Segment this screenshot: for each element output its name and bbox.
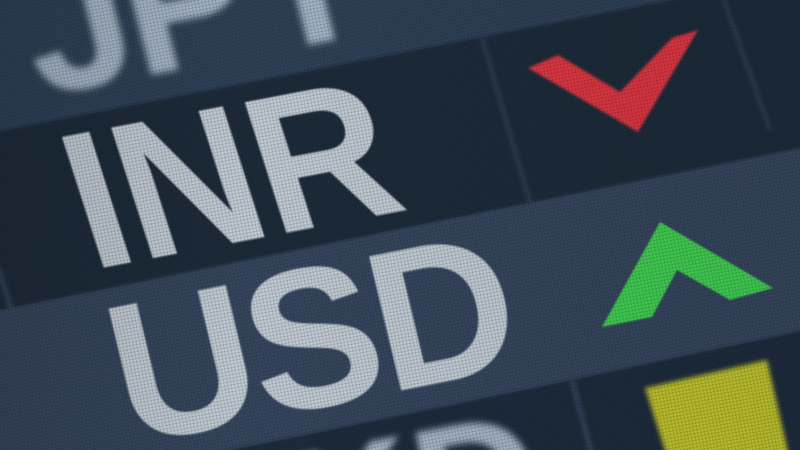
icon: green up arrow: [602, 222, 773, 327]
band: INR row: [0, 0, 800, 312]
band: bottom row: [0, 330, 800, 450]
icon: yellow flat marker: [645, 360, 790, 450]
text: INR: INR: [36, 37, 424, 311]
band: JPY row: [0, 0, 800, 134]
icon: red down arrow: [528, 30, 698, 132]
band: USD row: [0, 146, 800, 450]
